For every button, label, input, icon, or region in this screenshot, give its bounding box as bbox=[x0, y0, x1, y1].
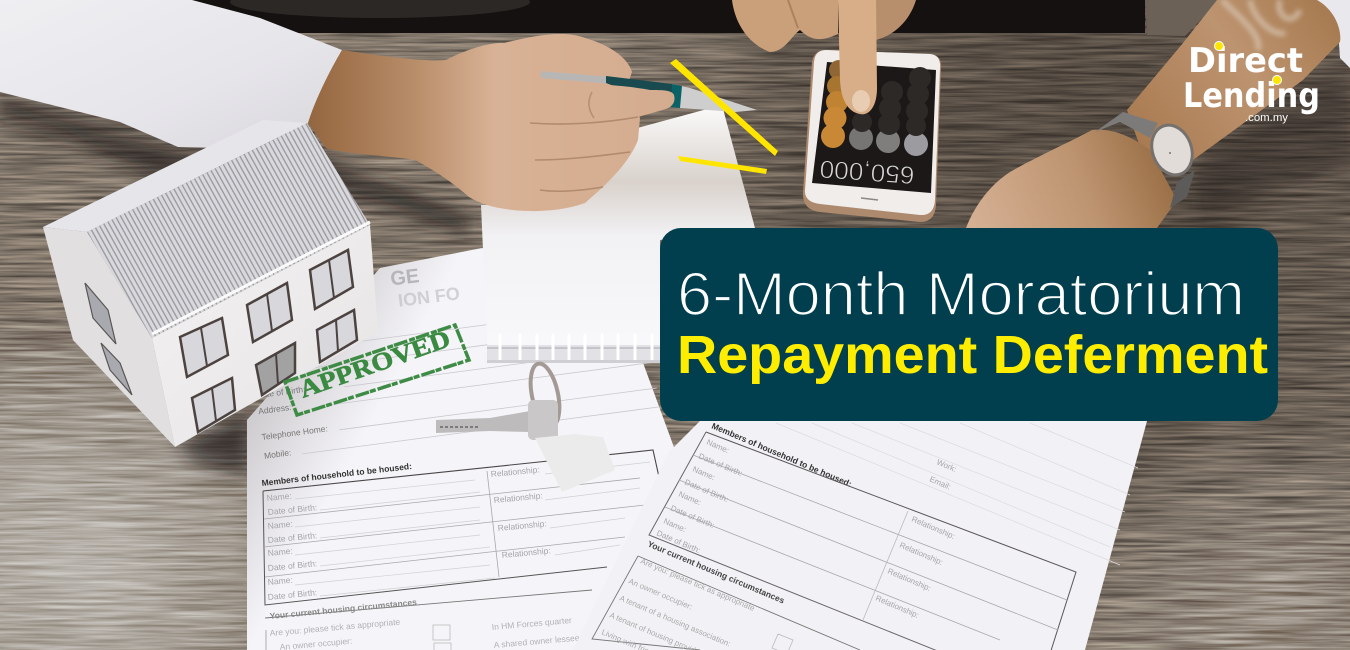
members of household table: Members of household to be housed: bbox=[261, 461, 413, 488]
front windows bbox=[180, 250, 357, 432]
members of household table: Date of Birth: bbox=[267, 530, 318, 545]
pointing fingers bbox=[732, 0, 916, 114]
title panel bbox=[660, 228, 1278, 421]
side wall bbox=[43, 227, 175, 447]
housing table bbox=[592, 539, 860, 650]
paper house model bbox=[43, 120, 378, 447]
dark background band bbox=[190, 0, 1145, 33]
calculator display: 650,000 bbox=[819, 154, 915, 189]
thumb bbox=[500, 83, 675, 126]
application form left bbox=[239, 248, 705, 650]
hand back bbox=[308, 34, 640, 211]
hand bbox=[966, 130, 1177, 228]
members table: Name: bbox=[677, 490, 702, 507]
housing table: An owner occupier: bbox=[627, 577, 694, 612]
members of household table: Date of Birth: bbox=[267, 587, 318, 602]
form heading graphic bbox=[389, 260, 461, 311]
members table: Relationship: bbox=[910, 515, 956, 541]
application form right bbox=[573, 421, 1147, 650]
members of household table: Name: bbox=[266, 491, 292, 503]
form contact fields: Date of Birth: bbox=[255, 384, 306, 400]
housing table: A tenant of a housing association: bbox=[618, 594, 732, 649]
title line two: Repayment Deferment bbox=[677, 325, 1268, 385]
form contact fields: Address: bbox=[258, 402, 292, 416]
application form right: Members of household to be housed: bbox=[710, 421, 853, 489]
members table: Date of Birth: bbox=[683, 478, 730, 504]
members of household table: Name: bbox=[267, 519, 293, 531]
dark fabric bbox=[1145, 0, 1220, 36]
housing circumstances section: Your current housing circumstances bbox=[269, 597, 417, 621]
hair bbox=[1222, 0, 1300, 50]
home button details bbox=[861, 198, 878, 200]
members table: Name: bbox=[691, 465, 716, 482]
members table: Date of Birth: bbox=[697, 452, 744, 478]
members table: Relationship: bbox=[874, 594, 920, 620]
members of household table: Relationship: bbox=[497, 518, 547, 533]
forearm bbox=[1127, 0, 1340, 175]
form heading graphic: GE bbox=[389, 265, 421, 290]
housing circumstances section: Are you: please tick as appropriate bbox=[269, 617, 401, 638]
front wall bbox=[152, 225, 378, 447]
members of household table: Relationship: bbox=[501, 545, 551, 560]
smartphone with calculator bbox=[803, 50, 941, 222]
approved stamp bbox=[285, 325, 469, 415]
logo bbox=[1183, 41, 1320, 124]
title line one: 6-Month Moratorium bbox=[677, 260, 1245, 328]
roof bbox=[87, 123, 370, 338]
fob bbox=[535, 434, 615, 492]
form contact fields bbox=[239, 304, 659, 462]
wristwatch bbox=[1095, 112, 1201, 208]
calculator screen bbox=[812, 62, 936, 193]
housing table: Are you: please tick as appropriate bbox=[639, 557, 757, 613]
form contact fields: Mobile: bbox=[263, 447, 292, 461]
logo word direct: Direct bbox=[1188, 41, 1303, 81]
calculator buttons bbox=[821, 60, 931, 156]
hand holding pen bbox=[308, 34, 757, 211]
spiral notepad bbox=[481, 105, 755, 363]
logo word lending: Lending bbox=[1183, 76, 1320, 116]
form contact fields: Telephone Home: bbox=[261, 423, 328, 442]
members table: Name: bbox=[662, 517, 687, 534]
members table: Name: bbox=[705, 438, 730, 455]
housing circumstances section: A shared owner lessee bbox=[493, 633, 580, 650]
housing circumstances section bbox=[265, 590, 592, 650]
housing circumstances section: In HM Forces quarter bbox=[491, 615, 572, 632]
approved stamp: APPROVED bbox=[296, 325, 454, 404]
right arm with fabric, hair and sleeve bbox=[966, 0, 1350, 228]
members of household table: Name: bbox=[267, 546, 293, 558]
members table: Relationship: bbox=[886, 567, 932, 593]
side windows bbox=[85, 283, 132, 395]
house keys with fob bbox=[436, 361, 615, 492]
members table: Date of Birth: bbox=[655, 529, 702, 555]
form heading graphic: ION FO bbox=[397, 283, 461, 311]
shirt sleeve bbox=[0, 0, 342, 148]
key blade bbox=[436, 411, 530, 433]
members of household table: Relationship: bbox=[493, 490, 543, 505]
members of household table: Date of Birth: bbox=[267, 502, 318, 517]
roof top fold bbox=[43, 120, 307, 232]
members table: Relationship: bbox=[898, 541, 944, 567]
members table bbox=[649, 432, 1076, 650]
members of household table: Relationship: bbox=[490, 464, 540, 479]
key rings bbox=[526, 361, 564, 429]
members table: Date of Birth: bbox=[669, 504, 716, 530]
yellow accent strokes bbox=[670, 59, 778, 174]
notepad spiral bbox=[487, 335, 660, 360]
members of household table: Name: bbox=[267, 575, 293, 587]
logo domain: .com.my bbox=[1245, 112, 1289, 124]
members table: Email: bbox=[928, 475, 952, 492]
housing table: Your current housing circumstances bbox=[646, 539, 786, 606]
pen bbox=[541, 71, 757, 112]
sleeve bbox=[1312, 0, 1350, 68]
members table: Work: bbox=[935, 458, 958, 474]
members of household table bbox=[261, 450, 659, 605]
members of household table: Date of Birth: bbox=[267, 558, 318, 573]
logo dots bbox=[1214, 42, 1282, 84]
